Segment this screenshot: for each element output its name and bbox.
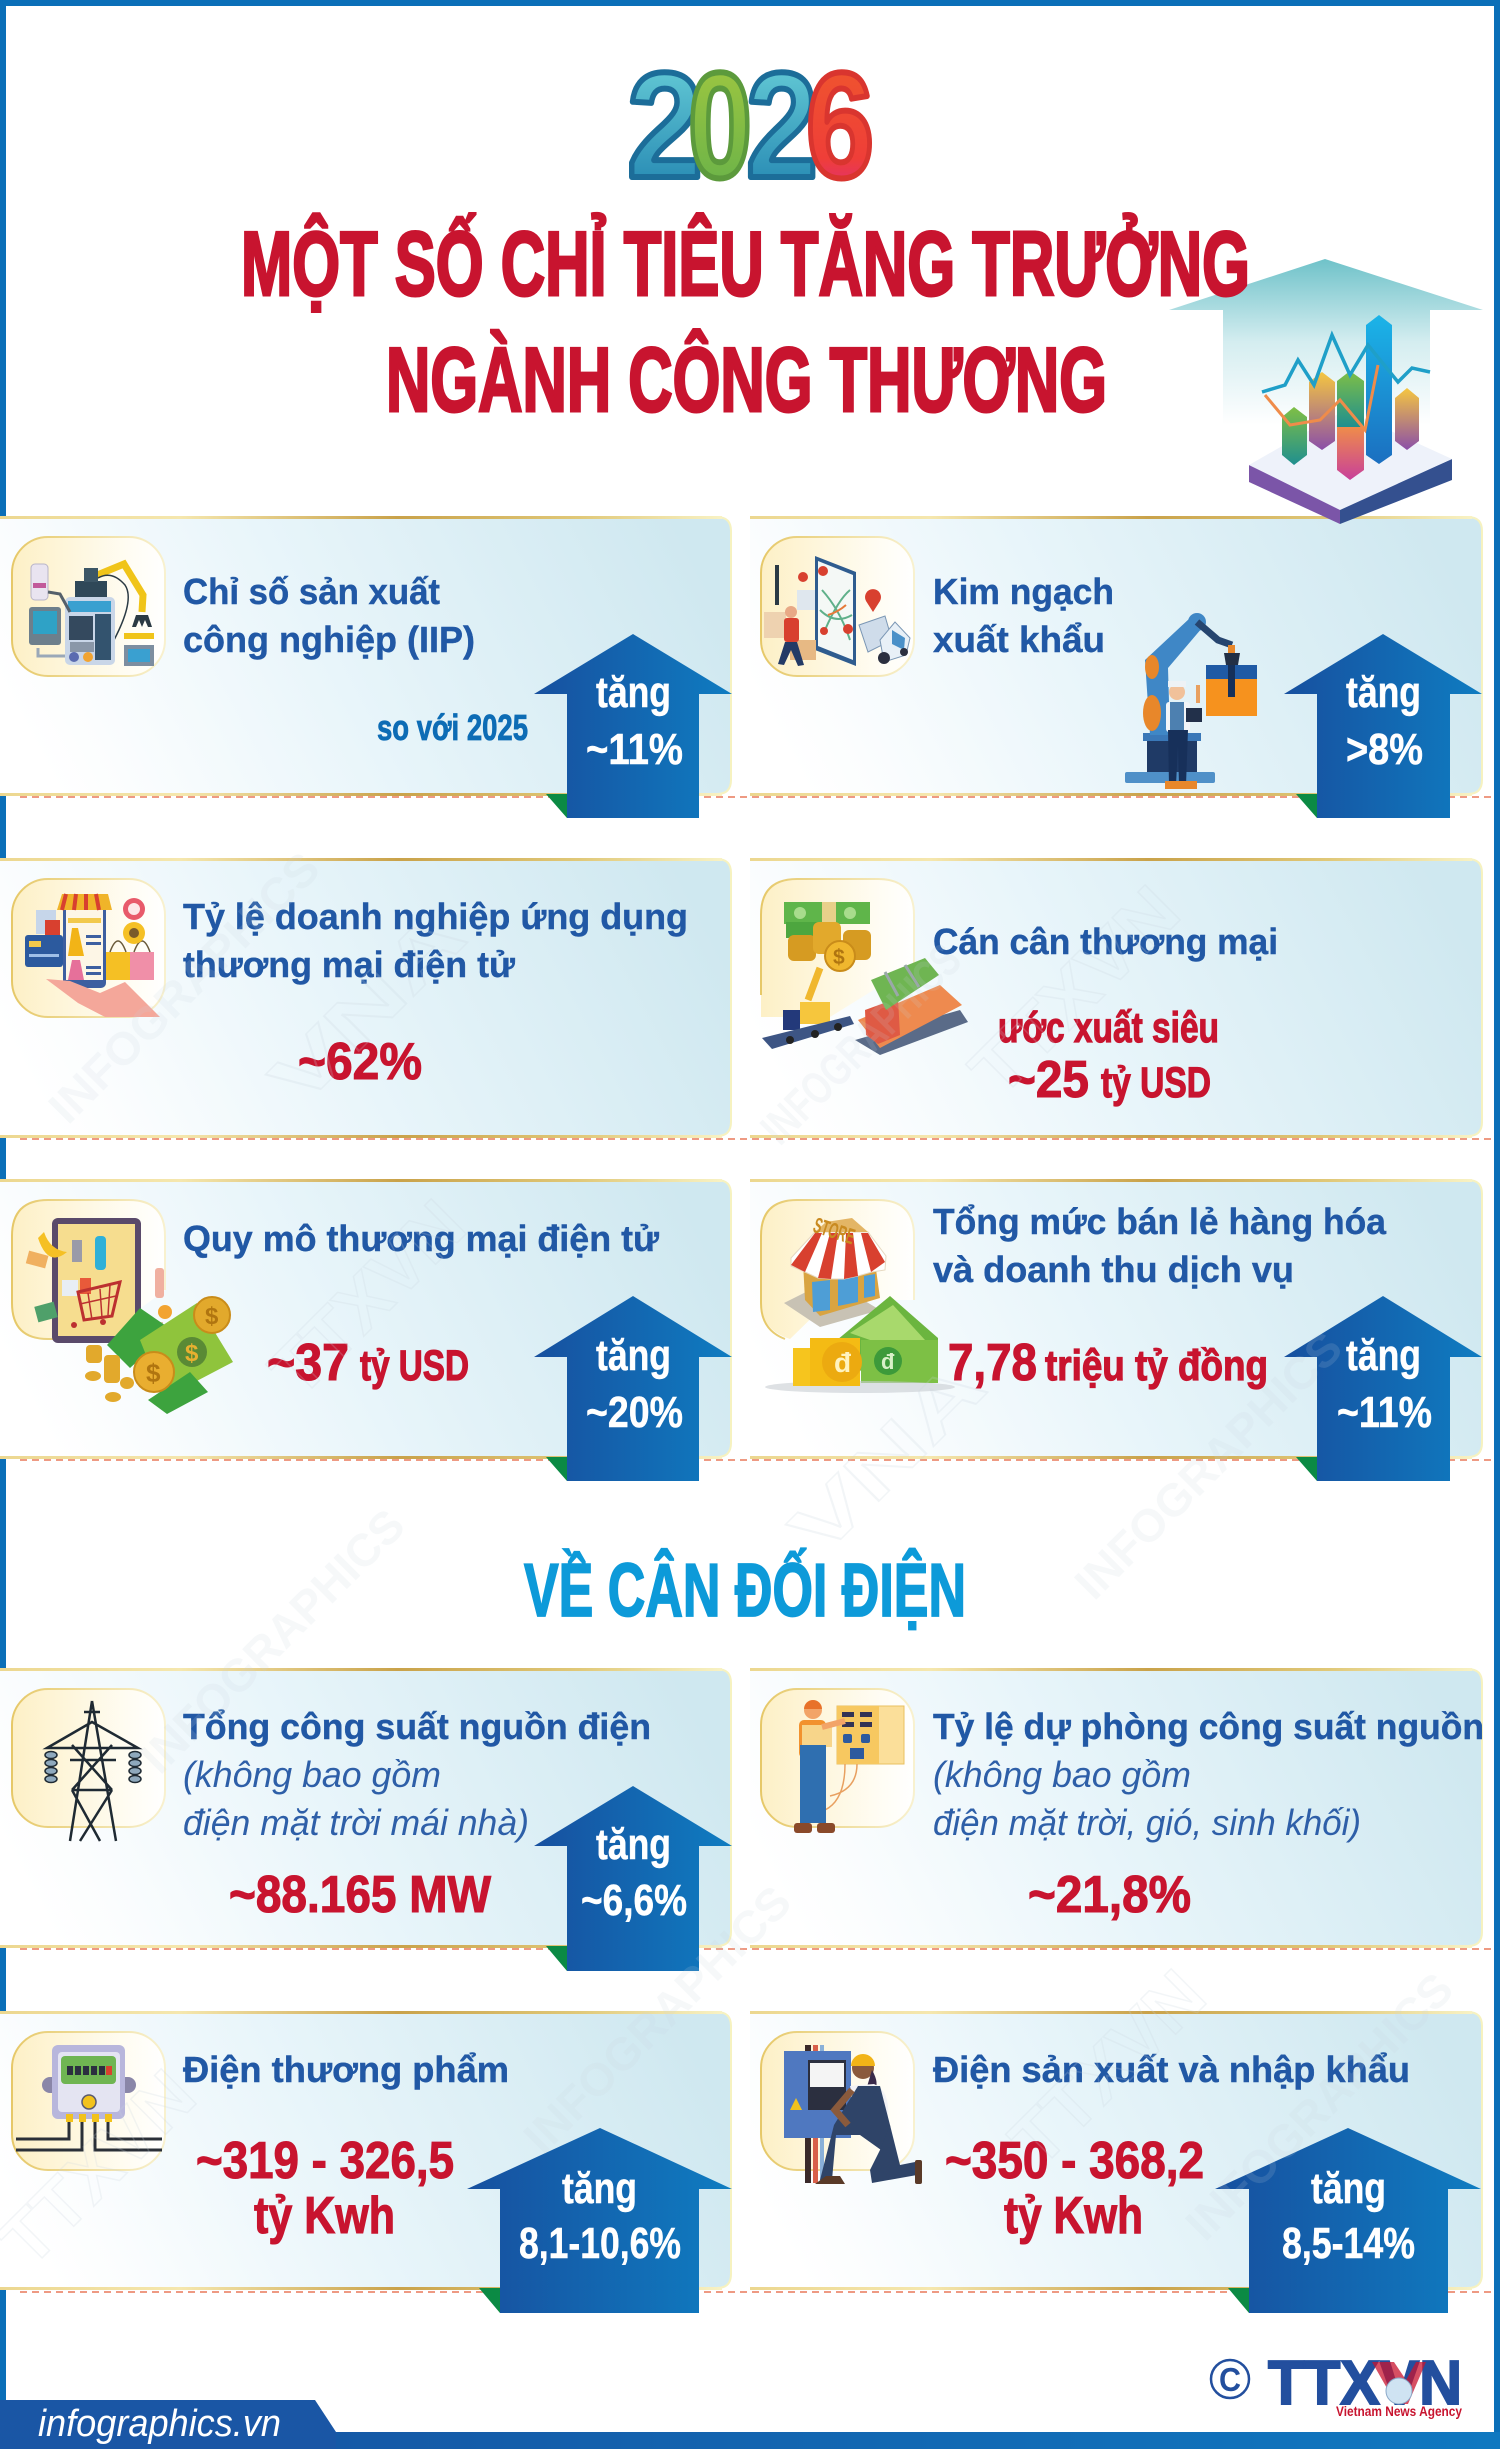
arrow: tăng 20%: tăng xyxy=(596,1331,671,1380)
illustration: robot arm and worker xyxy=(1125,613,1257,789)
value: ~21,8% xyxy=(1028,1866,1191,1924)
value: 7,78 xyxy=(948,1334,1037,1392)
title: NGÀNH CÔNG THƯƠNG xyxy=(386,329,1107,431)
value xyxy=(948,1334,1268,1392)
icon: technician at switchboard xyxy=(761,2032,922,2184)
heading: công nghiệp (IIP) xyxy=(183,619,475,660)
heading: (không bao gồm xyxy=(933,1754,1191,1795)
arrow: tăng 8,5-14%: tăng xyxy=(1311,2164,1386,2213)
card backgrounds xyxy=(0,517,1482,2288)
watermarks: INFOGRAPHICS xyxy=(750,933,971,1154)
heading: Tổng công suất nguồn điện xyxy=(183,1706,651,1747)
panel: kim ngạch xuất khẩu xyxy=(761,537,1482,818)
value: ước xuất siêu xyxy=(998,1004,1219,1052)
arrow: tăng 20%: ~20% xyxy=(586,1388,683,1437)
arrow: tăng 11%: tăng xyxy=(1346,1331,1421,1380)
icon: money and cargo xyxy=(761,879,968,1055)
heading: Quy mô thương mại điện tử xyxy=(183,1218,660,1259)
watermarks: INFOGRAPHICS xyxy=(1064,1321,1352,1609)
logo: TTXVN: TTXVN xyxy=(1268,2349,1462,2418)
arrow: tăng 11%: tăng xyxy=(596,668,671,717)
icon: shopping tablet and money xyxy=(12,1200,233,1414)
year 2026 xyxy=(627,41,874,209)
footer bar: infographics.vn xyxy=(38,2403,281,2445)
icon: money and cargo: $ xyxy=(833,946,845,969)
panel: tổng mức bán lẻ xyxy=(761,1200,1482,1481)
value xyxy=(267,1334,469,1392)
value: tỷ Kwh xyxy=(254,2187,395,2245)
value: tỷ Kwh xyxy=(1004,2187,1143,2245)
heading xyxy=(183,1706,651,1843)
icon: store and money: đ xyxy=(881,1349,895,1374)
value xyxy=(196,2132,454,2245)
icon: store and money xyxy=(761,1200,955,1393)
heading: Tổng mức bán lẻ hàng hóa xyxy=(933,1201,1387,1242)
value xyxy=(998,1004,1219,1109)
icon: store and money: STORE xyxy=(810,1212,858,1249)
heading: Chỉ số sản xuất xyxy=(183,571,440,612)
icon: worker at panel xyxy=(761,1689,914,1833)
heading: Tỷ lệ dự phòng công suất nguồn xyxy=(933,1706,1484,1747)
heading: Tỷ lệ doanh nghiệp ứng dụng xyxy=(183,896,688,937)
watermarks xyxy=(0,842,1463,2281)
value: ~25 xyxy=(1008,1051,1089,1109)
year 2026: 6 xyxy=(806,41,874,209)
panel: tổng công suất nguồn điện xyxy=(12,1689,732,1971)
year 2026: 2 xyxy=(627,41,703,209)
value: ~319 - 326,5 xyxy=(196,2132,454,2190)
value: triệu tỷ đồng xyxy=(1045,1342,1268,1390)
panel: điện thương phẩm xyxy=(12,2032,732,2313)
icon: online shop xyxy=(12,879,165,1017)
heading: điện mặt trời, gió, sinh khối) xyxy=(933,1802,1361,1843)
value: ~62% xyxy=(298,1033,422,1091)
heading: Điện thương phẩm xyxy=(183,2049,509,2090)
panel: tỷ lệ dự phòng công suất nguồn xyxy=(761,1689,1484,1924)
logo: TTXVN: Vietnam News Agency xyxy=(1336,2403,1462,2419)
year 2026: 2 xyxy=(746,41,818,209)
icon: shopping tablet and money: $ xyxy=(205,1303,219,1330)
arrow: tăng 8,5-14% xyxy=(1215,2128,1481,2313)
watermarks: INFOGRAPHICS xyxy=(38,842,330,1133)
icon: shopping tablet and money: $ xyxy=(185,1340,199,1367)
heading xyxy=(933,1706,1484,1843)
icon: power pylon xyxy=(12,1689,165,1841)
value: ~350 - 368,2 xyxy=(945,2132,1204,2190)
watermarks: INFOGRAPHICS xyxy=(513,1875,801,2163)
heading xyxy=(933,571,1114,660)
heading xyxy=(183,571,475,660)
watermarks: TTXVN xyxy=(955,871,1195,1111)
heading xyxy=(933,1201,1387,1290)
icon: isometric bar chart xyxy=(1249,315,1452,524)
value: ~88.165 MW xyxy=(229,1866,492,1924)
arrow: tăng 11%: ~11% xyxy=(586,725,683,774)
watermarks: VNA xyxy=(255,895,481,1121)
value: ~37 xyxy=(267,1334,349,1392)
heading: và doanh thu dịch vụ xyxy=(933,1249,1294,1290)
panel: cán cân thương mại xyxy=(761,879,1278,1109)
panel: tỷ lệ doanh nghiệp thương mại điện tử xyxy=(12,879,688,1091)
value xyxy=(945,2132,1204,2245)
icon: industrial machine xyxy=(12,537,165,676)
arrow: tăng 8,1-10,6%: 8,1-10,6% xyxy=(519,2219,681,2268)
watermarks: TTXVN xyxy=(995,1955,1221,2181)
value: tỷ USD xyxy=(1101,1059,1211,1107)
section heading: VỀ CÂN ĐỐI ĐIỆN xyxy=(524,1548,966,1632)
watermarks: INFOGRAPHICS xyxy=(1175,1962,1463,2250)
icon: large light arrow xyxy=(1169,259,1483,425)
year 2026: 0 xyxy=(688,41,752,209)
arrow: tăng 6,6%: ~6,6% xyxy=(581,1876,687,1925)
arrow: tăng 8,5-14%: 8,5-14% xyxy=(1282,2219,1415,2268)
icon: shopping tablet and money: $ xyxy=(146,1358,161,1388)
comparison note: so với 2025 xyxy=(377,707,528,748)
logo: TTXVN: C xyxy=(1219,2361,1241,2398)
arrow: tăng 6,6% xyxy=(534,1786,732,1971)
arrow: tăng 8,1-10,6% xyxy=(467,2128,732,2313)
value: tỷ USD xyxy=(360,1342,469,1390)
arrow: tăng 11%: ~11% xyxy=(1337,1388,1432,1437)
heading: điện mặt trời mái nhà) xyxy=(183,1802,529,1843)
arrow: tăng 8%: >8% xyxy=(1346,725,1423,774)
panel: quy mô thương mại điện tử xyxy=(12,1200,732,1481)
arrow: tăng 11% xyxy=(534,634,732,818)
arrow: tăng 8% xyxy=(1284,634,1482,818)
icon: electric meter xyxy=(12,2032,165,2170)
arrow: tăng 8,1-10,6%: tăng xyxy=(562,2164,637,2213)
arrow: tăng 20% xyxy=(534,1296,732,1481)
icon: logistics map xyxy=(761,537,914,676)
arrow: tăng 6,6%: tăng xyxy=(596,1820,671,1869)
panel: chỉ số sản xuất công nghiệp xyxy=(12,537,732,818)
panel: điện sản xuất và nhập khẩu xyxy=(761,2032,1481,2313)
arrow: tăng 11% xyxy=(1284,1296,1482,1481)
title xyxy=(241,213,1250,431)
heading: (không bao gồm xyxy=(183,1754,441,1795)
heading: thương mại điện tử xyxy=(183,944,516,985)
heading: Điện sản xuất và nhập khẩu xyxy=(933,2049,1410,2090)
watermarks: TTXVN xyxy=(255,1185,481,1411)
arrow: tăng 8%: tăng xyxy=(1346,668,1421,717)
heading: xuất khẩu xyxy=(933,619,1105,660)
watermarks: VNA xyxy=(775,1345,1001,1571)
heading xyxy=(183,896,688,985)
icon: store and money: đ xyxy=(834,1347,851,1378)
heading: Kim ngạch xyxy=(933,571,1114,612)
footer bar xyxy=(0,2400,1500,2449)
watermarks: INFOGRAPHICS xyxy=(130,1499,415,1783)
heading: Cán cân thương mại xyxy=(933,921,1278,962)
